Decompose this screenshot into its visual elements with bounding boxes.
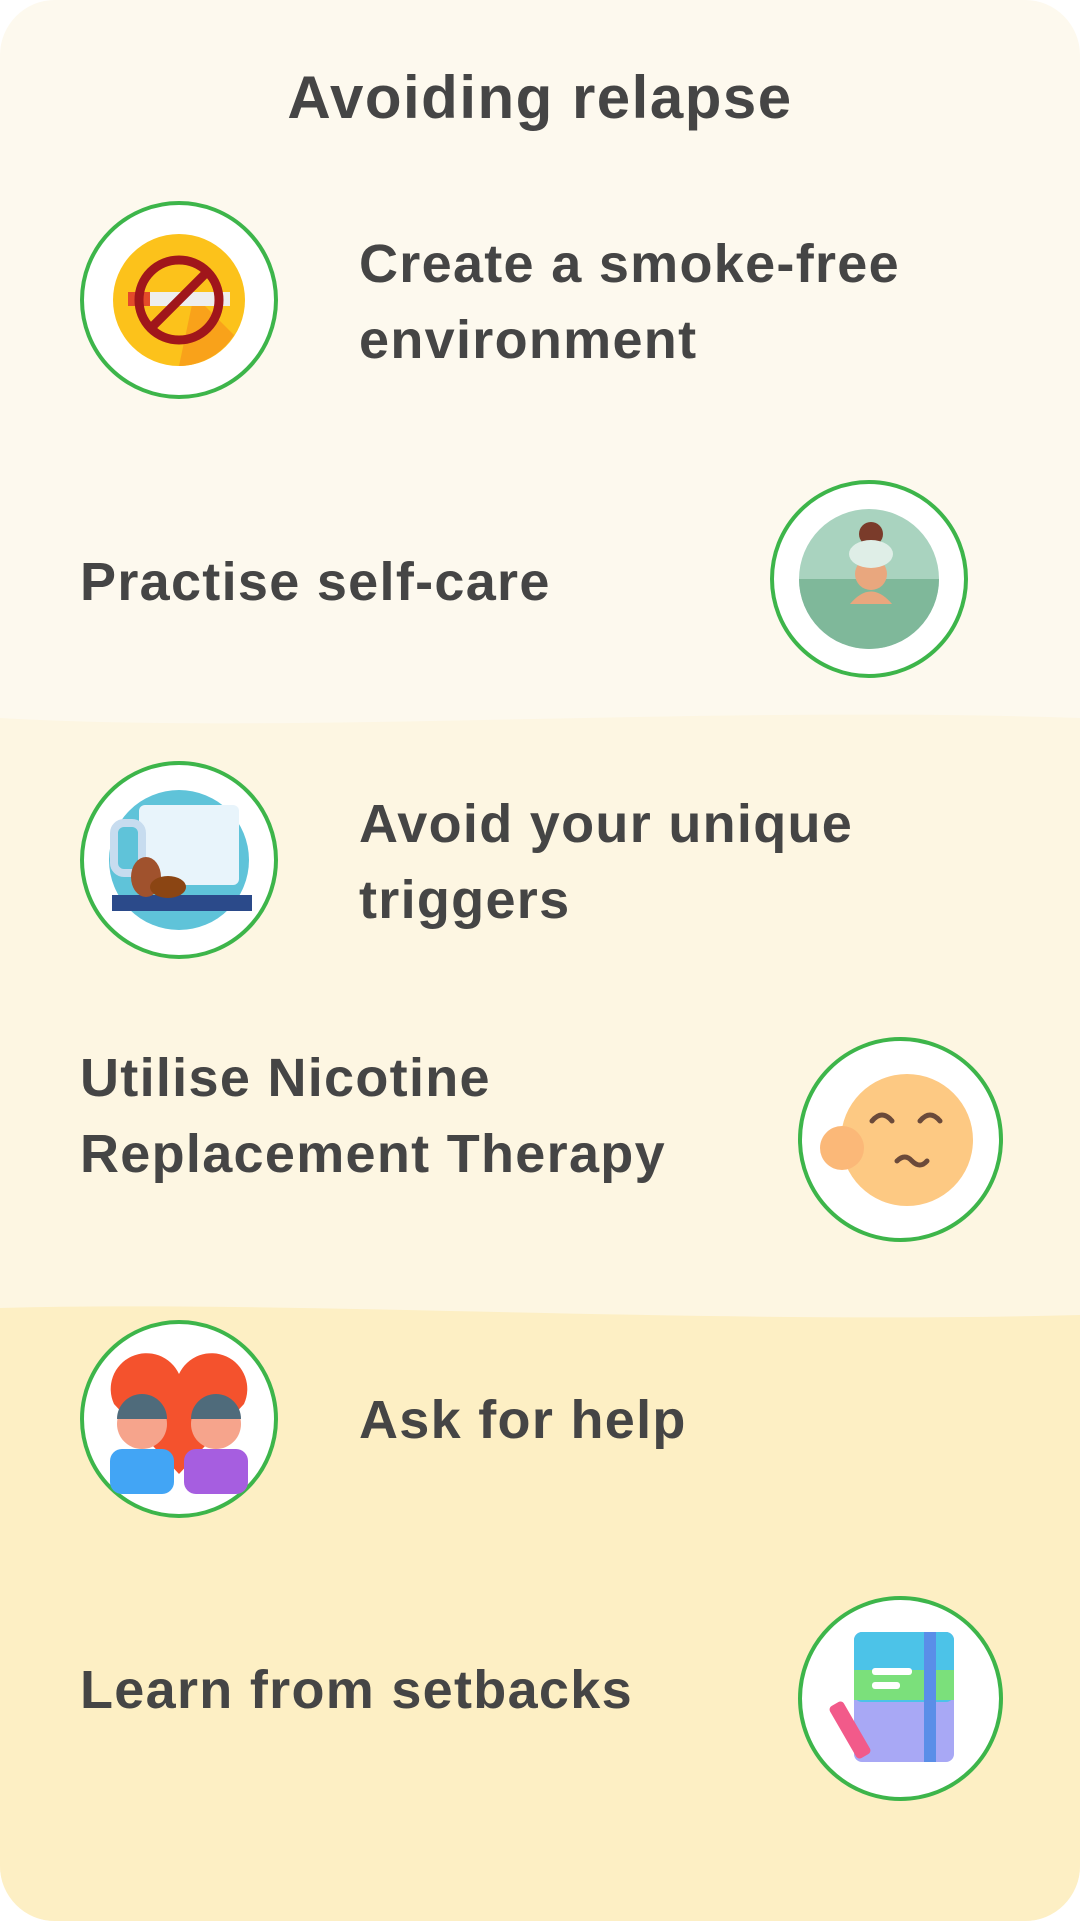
text: triggers bbox=[359, 794, 853, 930]
text: self-care: Practise self-care bbox=[80, 552, 551, 612]
text: NRT: Replacement Therapy bbox=[80, 1124, 666, 1184]
title: Avoiding relapse bbox=[287, 64, 793, 131]
icon: coffee bbox=[80, 761, 278, 959]
text: NRT: Utilise Nicotine bbox=[80, 1048, 491, 1108]
text: smoke-free bbox=[359, 234, 900, 370]
icon: notebook bbox=[798, 1596, 1003, 1801]
icon: two people bbox=[80, 1320, 278, 1518]
text: help: Ask for help bbox=[359, 1390, 687, 1450]
text: setbacks: Learn from setbacks bbox=[80, 1660, 633, 1720]
icon: no smoking bbox=[80, 201, 278, 399]
text: NRT bbox=[80, 1048, 666, 1184]
text: smoke-free: Create a smoke-free bbox=[359, 234, 900, 294]
icon: face bbox=[798, 1037, 1003, 1242]
text: smoke-free: environment bbox=[359, 310, 697, 370]
text: triggers: triggers bbox=[359, 870, 570, 930]
icon: spa bbox=[770, 480, 968, 678]
text: triggers: Avoid your unique bbox=[359, 794, 853, 854]
